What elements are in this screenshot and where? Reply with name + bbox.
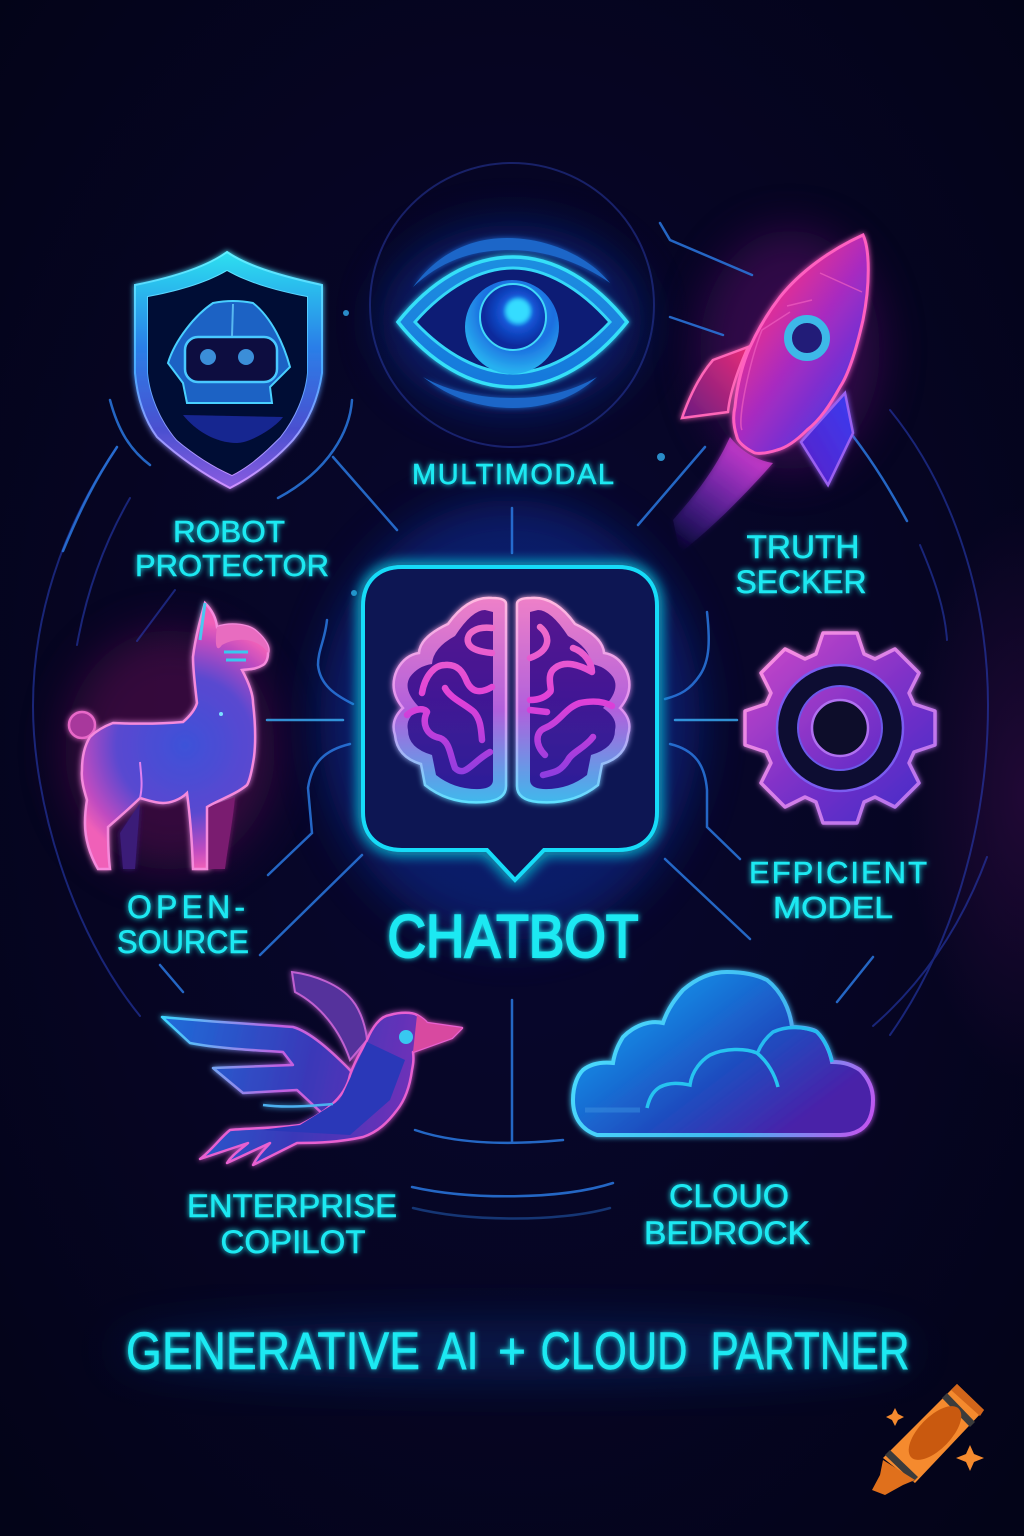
footer title: AI — [438, 1322, 478, 1381]
label: cloud bedrock: CLOUO — [669, 1178, 789, 1214]
icon: crayon — [872, 1384, 984, 1495]
label: enterprise copilot: ENTERPRISE — [187, 1188, 397, 1224]
right hemisphere — [517, 598, 629, 802]
label: efficient model: EFPICIENT — [749, 855, 927, 890]
footer title: GENERATIVE — [126, 1322, 420, 1381]
label: robot protector — [135, 514, 329, 583]
label: open-source: OPEN- — [127, 889, 245, 925]
main wing — [162, 1017, 368, 1130]
label: efficient model: MODEL — [773, 890, 893, 925]
icon: gear — [745, 633, 935, 823]
upper wing — [292, 972, 367, 1060]
label: open-source — [117, 889, 249, 960]
icon: eye — [398, 238, 627, 408]
robot head — [168, 301, 290, 443]
label: open-source: SOURCE — [117, 924, 249, 960]
connector lines and orbit arcs — [33, 163, 988, 1218]
label: cloud bedrock: BEDROCK — [644, 1215, 810, 1251]
label: truth seeker: SECKER — [736, 564, 866, 600]
icon: rocket — [673, 235, 868, 553]
label: enterprise copilot: COPILOT — [220, 1224, 366, 1260]
footer title: CLOUD — [540, 1322, 688, 1381]
left hemisphere — [394, 598, 506, 802]
footer title: + — [498, 1322, 526, 1381]
icon: llama — [69, 603, 269, 869]
footer title — [126, 1322, 910, 1381]
body — [200, 1013, 462, 1165]
label: robot protector: PROTECTOR — [135, 548, 329, 583]
label: truth seeker: TRUTH — [746, 529, 860, 565]
label: multimodal: MULTIMODAL — [412, 459, 614, 491]
icon: robot shield — [135, 252, 322, 488]
icon: cloud — [573, 972, 873, 1135]
label: robot protector: ROBOT — [173, 514, 285, 549]
footer title: PARTNER — [710, 1322, 910, 1381]
brain folds — [407, 627, 612, 775]
icon: brain — [394, 598, 629, 802]
label: cloud bedrock — [644, 1178, 810, 1251]
label: enterprise copilot — [187, 1188, 397, 1260]
label: truth seeker — [736, 529, 866, 600]
panel: chatbot brain bubble — [363, 567, 657, 880]
heading: chatbot: CHATBOT — [388, 903, 638, 970]
label: efficient model — [749, 855, 927, 925]
icon: bird — [162, 972, 462, 1165]
